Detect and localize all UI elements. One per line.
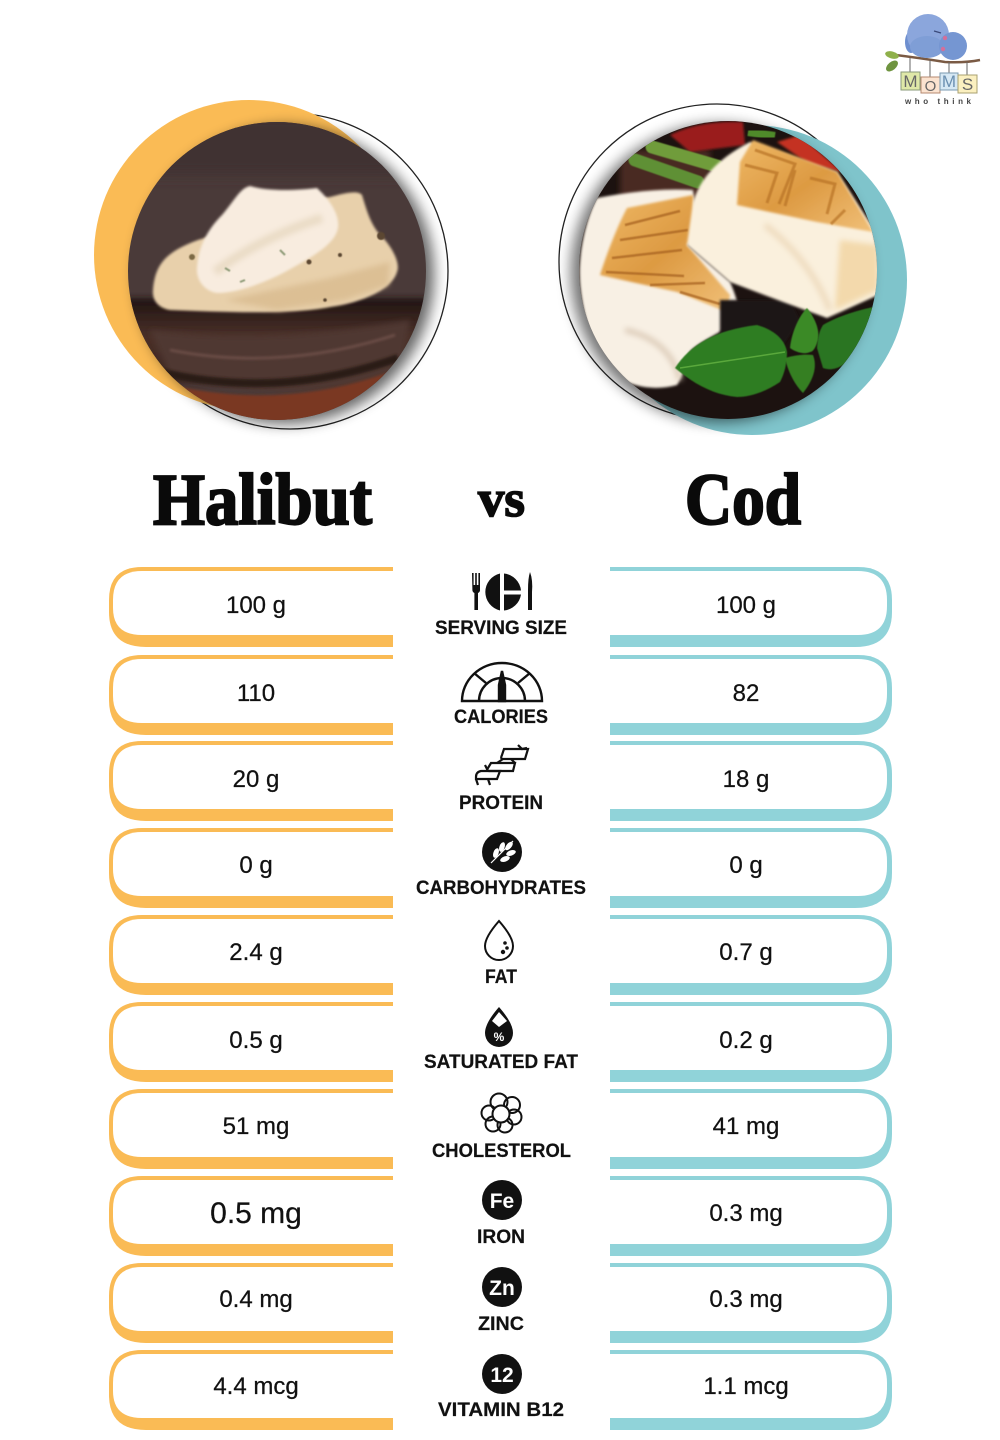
halibut value: 0 g: 0 g — [239, 852, 273, 879]
icon: saturated fat drop — [485, 1007, 513, 1047]
halibut value: 20 g — [109, 741, 393, 821]
cod value: 82: 82 — [733, 680, 759, 707]
logo letter blocks: S — [962, 75, 973, 94]
photo: halibut with sauce — [128, 122, 426, 420]
icon: iron Fe: Fe — [490, 1190, 514, 1213]
icon: iron Fe — [482, 1180, 522, 1220]
row: saturated fat — [109, 1002, 892, 1082]
row: cholesterol — [109, 1089, 892, 1169]
row: fat — [109, 915, 892, 995]
panel: halibut photo — [94, 100, 448, 430]
logo letter blocks: M — [942, 72, 956, 91]
icon: protein helix — [476, 745, 528, 785]
heading: vs: vs — [478, 471, 525, 528]
halibut value: 0.4 mg — [109, 1263, 393, 1343]
cod value: 41 mg — [610, 1089, 892, 1169]
icon: calorie gauge — [462, 663, 542, 701]
heading: Halibut: Halibut — [153, 459, 372, 540]
halibut value: 100 g — [109, 567, 393, 647]
halibut value: 110: 110 — [237, 680, 275, 707]
cod value: 18 g — [610, 741, 892, 821]
row: protein — [109, 741, 892, 821]
cod value: 100 g — [610, 567, 892, 647]
cod value: 41 mg: 41 mg — [713, 1113, 779, 1140]
logo birds — [884, 14, 980, 77]
label: fat: FAT — [485, 967, 517, 988]
halibut value: 100 g: 100 g — [226, 592, 286, 619]
label: saturated fat: SATURATED FAT — [424, 1052, 578, 1073]
logo letter blocks: M — [903, 72, 918, 91]
heading: Cod: Cod — [685, 459, 801, 540]
icon: zinc Zn — [482, 1267, 522, 1307]
halibut value: 51 mg — [109, 1089, 393, 1169]
halibut value: 110 — [109, 655, 393, 735]
cod value: 0 g — [610, 828, 892, 908]
cod value: 0.7 g: 0.7 g — [719, 939, 773, 966]
label: calories: CALORIES — [454, 707, 548, 728]
cod value: 0.7 g — [610, 915, 892, 995]
row: calories — [109, 655, 892, 735]
icon: vitamin B12: 12 — [490, 1364, 514, 1387]
cod value: 0.3 mg: 0.3 mg — [709, 1200, 783, 1227]
icon: cholesterol cluster — [482, 1094, 522, 1132]
halibut value: 0.5 g: 0.5 g — [229, 1027, 283, 1054]
cod value: 1.1 mcg — [610, 1350, 892, 1430]
logo tagline: who think — [904, 97, 972, 106]
halibut value: 0.5 mg — [109, 1176, 393, 1256]
halibut value: 51 mg: 51 mg — [223, 1113, 289, 1140]
halibut value: 4.4 mcg — [109, 1350, 393, 1430]
icon: vitamin B12 — [482, 1354, 522, 1394]
halibut value: 20 g: 20 g — [233, 766, 279, 793]
photo: cod with basil — [575, 118, 885, 423]
row: serving size — [109, 567, 892, 647]
halibut value: 0.5 mg: 0.5 mg — [210, 1197, 302, 1230]
cod value: 0.2 g: 0.2 g — [719, 1027, 773, 1054]
label: cholesterol: CHOLESTEROL — [432, 1141, 571, 1162]
icon: fat drop — [485, 921, 513, 960]
icon: fork, plate and knife — [472, 572, 532, 610]
cod value: 0 g: 0 g — [729, 852, 763, 879]
panel: cod photo — [559, 104, 907, 435]
halibut value: 0.5 g — [109, 1002, 393, 1082]
halibut value: 4.4 mcg: 4.4 mcg — [213, 1373, 299, 1400]
cod value: 0.2 g — [610, 1002, 892, 1082]
icon: zinc Zn: Zn — [489, 1277, 515, 1300]
cod value: 82 — [610, 655, 892, 735]
cod value: 0.3 mg — [610, 1176, 892, 1256]
cod value: 0.3 mg: 0.3 mg — [709, 1286, 783, 1313]
logo: Moms Who Think — [884, 14, 980, 106]
logo letter blocks — [901, 72, 977, 95]
row: carbohydrates — [109, 828, 892, 908]
logo letter blocks: O — [925, 78, 936, 95]
cod value: 1.1 mcg: 1.1 mcg — [703, 1373, 789, 1400]
halibut value: 2.4 g — [109, 915, 393, 995]
icon: wheat in circle — [482, 832, 522, 872]
row: vitamin B12 — [109, 1350, 892, 1430]
label: serving size: SERVING SIZE — [435, 618, 567, 639]
row: iron — [109, 1176, 892, 1256]
cod value: 0.3 mg — [610, 1263, 892, 1343]
label: carbohydrates: CARBOHYDRATES — [416, 878, 586, 899]
halibut value: 0.4 mg: 0.4 mg — [219, 1286, 293, 1313]
label: zinc: ZINC — [478, 1314, 524, 1335]
cod value: 100 g: 100 g — [716, 592, 776, 619]
icon: saturated fat drop: % — [494, 1030, 505, 1044]
row: zinc — [109, 1263, 892, 1343]
label: iron: IRON — [477, 1227, 525, 1248]
label: vitamin B12: VITAMIN B12 — [438, 1400, 564, 1421]
cod value: 18 g: 18 g — [723, 766, 769, 793]
label: protein: PROTEIN — [459, 793, 543, 814]
halibut value: 2.4 g: 2.4 g — [229, 939, 283, 966]
halibut value: 0 g — [109, 828, 393, 908]
